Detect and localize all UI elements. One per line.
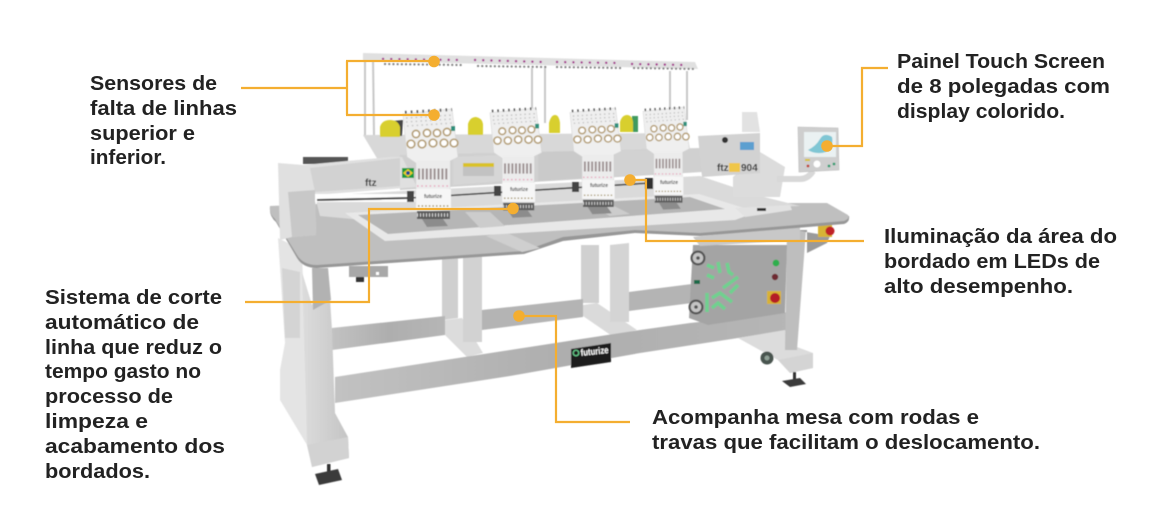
emergency box (797, 225, 834, 253)
callout: mesa com rodas (513, 310, 1040, 454)
left foot (315, 464, 342, 485)
rod (407, 178, 653, 202)
text: mesa: travas que facilitam o deslocamento. (652, 431, 1040, 454)
embroidery head 2: futurize (510, 187, 528, 193)
connector: painel (827, 68, 888, 146)
embroidery head 4: futurize (660, 180, 678, 186)
embroidery head 4 (643, 107, 689, 210)
embroidery head 3 (570, 108, 621, 214)
embroidery head 1: futurize (424, 194, 442, 200)
hoop frame (345, 194, 792, 241)
text: corte: Sistema de corte (45, 286, 222, 309)
text: corte: automático de (45, 311, 199, 334)
rear beam of the head assembly (363, 133, 702, 190)
futurize plate: futurize (580, 345, 609, 359)
text: corte: processo de (45, 385, 173, 408)
thread stand (363, 53, 698, 136)
text: sensores: falta de linhas (90, 97, 237, 120)
connector: iluminação (630, 180, 864, 241)
text: painel: Painel Touch Screen (897, 50, 1105, 73)
text: corte: linha que reduz o (45, 336, 222, 359)
callout: iluminação (624, 174, 1117, 298)
futurize plate (571, 343, 611, 368)
text: painel: display colorido. (897, 100, 1065, 123)
machine illustration (270, 53, 849, 485)
callout: sensores de linha (90, 56, 440, 169)
table top (270, 203, 849, 268)
marker: mesa (513, 310, 525, 322)
brazil flag (402, 168, 414, 178)
marker: lower sensor (428, 109, 440, 121)
text: mesa: Acompanha mesa com rodas e (652, 406, 979, 429)
text: corte: acabamento dos (45, 435, 225, 458)
touch screen panel (798, 127, 839, 172)
right housing (698, 112, 785, 197)
connector: corte (245, 209, 513, 302)
text: sensores: Sensores de (90, 72, 217, 95)
text: corte (45, 286, 225, 483)
text: iluminação (884, 225, 1117, 298)
embroidery head 1 (403, 109, 458, 227)
under-table band (693, 226, 800, 246)
front cover panels (453, 150, 657, 185)
rear legs and back beams (332, 243, 692, 357)
connector: sensores (241, 61, 433, 115)
text: corte: tempo gasto no (45, 360, 201, 383)
text: sensores: inferior. (90, 146, 166, 169)
right foot (782, 372, 806, 387)
front lower beam (335, 312, 790, 403)
callout: painel touch screen (821, 50, 1110, 152)
embroidery head 2 (490, 108, 542, 218)
screen arm (777, 171, 813, 179)
callout: sistema de corte (45, 203, 519, 483)
marker: corte (507, 203, 519, 214)
left leg (278, 238, 349, 467)
text: corte: limpeza e (45, 410, 148, 433)
text: painel: de 8 polegadas com (897, 75, 1110, 98)
marker: iluminação (624, 174, 636, 186)
right housing: 904 (741, 163, 758, 174)
connector: mesa (519, 316, 630, 422)
area behind the hoop (315, 176, 800, 222)
text: sensores (90, 72, 237, 169)
electrical panel (688, 245, 787, 325)
right housing: ftz (717, 163, 729, 174)
embroidery head 3: futurize (590, 183, 608, 189)
marker: painel (821, 140, 833, 152)
right leg and caster (738, 230, 813, 373)
text: sensores: superior e (90, 122, 195, 145)
under-table box (349, 266, 388, 282)
left gantry arm (278, 157, 417, 240)
text: painel (897, 50, 1110, 123)
text: iluminação: alto desempenho. (884, 275, 1073, 298)
text: corte: bordados. (45, 460, 150, 483)
left gantry arm: ftz (365, 178, 377, 189)
text: mesa (652, 406, 1040, 454)
text: iluminação: Iluminação da área do (884, 225, 1117, 248)
text: iluminação: bordado em LEDs de (884, 250, 1100, 273)
yellow thread cones (380, 115, 638, 137)
marker: upper sensor (428, 56, 440, 67)
